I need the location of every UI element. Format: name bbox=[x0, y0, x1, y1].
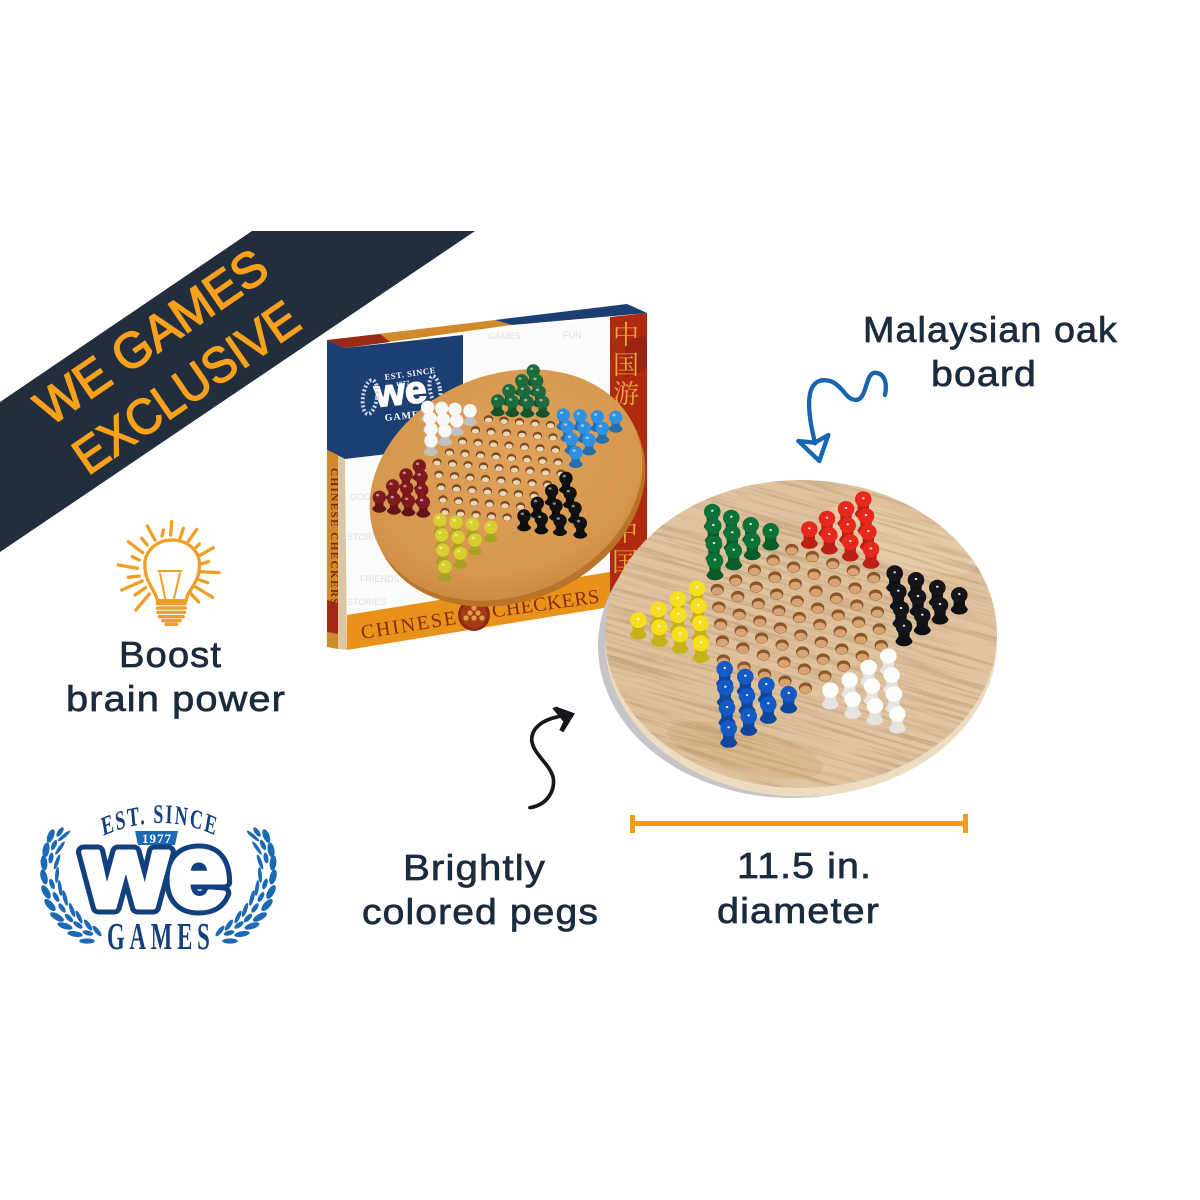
logo arched text: EST. SINCE bbox=[100, 805, 216, 836]
arrow: black squiggle to pegs bbox=[530, 707, 575, 808]
box mini logo: EST. SINCE bbox=[384, 365, 436, 382]
red pegs bbox=[801, 491, 880, 569]
box faint background words: FUN bbox=[563, 330, 582, 340]
board face bbox=[332, 327, 680, 643]
board edge bbox=[335, 333, 683, 649]
text: Malaysian oak board: board bbox=[931, 353, 1037, 394]
green pegs bbox=[704, 504, 779, 580]
logo year ribbon: 1977 bbox=[142, 831, 172, 846]
box orange band: CHINESE bbox=[359, 607, 458, 644]
text: boost brain power: Boost bbox=[119, 634, 222, 675]
yellow pegs bbox=[630, 580, 710, 663]
black pegs bbox=[517, 472, 587, 539]
green pegs bbox=[491, 364, 550, 418]
text: brightly colored pegs: Brightly bbox=[403, 847, 546, 888]
board holes bbox=[432, 415, 566, 521]
banner text: WE GAMES bbox=[25, 238, 278, 436]
box red panel: 中 bbox=[612, 518, 638, 547]
text: 11.5 in. diameter: diameter bbox=[717, 890, 880, 931]
logo WE lettering: we bbox=[83, 814, 228, 930]
box mini logo bbox=[361, 365, 442, 424]
text: 11.5 in. diameter bbox=[717, 845, 880, 931]
white pegs bbox=[822, 648, 906, 734]
box mini logo: 1977 bbox=[396, 381, 410, 388]
text: brightly colored pegs bbox=[362, 847, 599, 932]
logo laurels bbox=[39, 826, 278, 944]
box faint background words: GAMES bbox=[488, 331, 521, 341]
measure bar: diameter bbox=[630, 814, 968, 833]
blue pegs bbox=[556, 408, 623, 468]
box front face bbox=[345, 313, 647, 650]
box mini logo: GAMES bbox=[384, 409, 427, 424]
box red panel: 国 bbox=[613, 351, 639, 380]
box faint background words: GOOD bbox=[350, 492, 378, 502]
box faint background words: FRIENDS bbox=[360, 574, 400, 584]
banner text: EXCLUSIVE bbox=[62, 290, 310, 485]
text: boost brain power bbox=[66, 634, 286, 719]
text: brightly colored pegs: colored pegs bbox=[362, 891, 599, 932]
box orange band bbox=[347, 572, 610, 650]
box faint background words: STORIES bbox=[347, 597, 386, 607]
box red panel bbox=[610, 313, 647, 607]
box lid edge bbox=[327, 304, 647, 348]
logo: WE Games bbox=[40, 805, 277, 957]
blue pegs bbox=[716, 661, 797, 748]
box spine bbox=[327, 340, 347, 650]
box mini logo: we bbox=[372, 369, 429, 416]
box orange band: CHECKERS bbox=[491, 586, 601, 622]
box spine: CHINESE CHECKERS bbox=[328, 468, 340, 606]
board: Malaysian oak board with pegs bbox=[598, 480, 997, 798]
text: Malaysian oak board: Malaysian oak bbox=[863, 309, 1118, 350]
dark red pegs bbox=[372, 459, 430, 518]
white pegs bbox=[421, 401, 477, 456]
text: 11.5 in. diameter: 11.5 in. bbox=[737, 845, 872, 886]
logo WE lettering: we bbox=[83, 814, 228, 930]
board holes bbox=[711, 544, 888, 694]
box faint background words: STORIES bbox=[347, 532, 386, 542]
board shadow bbox=[598, 494, 986, 798]
logo year ribbon bbox=[135, 831, 178, 846]
logo GAMES lettering: GAMES bbox=[107, 915, 215, 957]
black pegs bbox=[886, 565, 968, 646]
board: box game board with pegs bbox=[332, 327, 683, 649]
product box bbox=[327, 304, 647, 650]
board face bbox=[605, 480, 997, 788]
board edge bbox=[605, 486, 997, 796]
icon: light bulb bbox=[118, 522, 219, 624]
text: Malaysian oak board bbox=[863, 309, 1118, 394]
box red panel: 游 bbox=[613, 380, 639, 409]
box red panel: 中 bbox=[613, 321, 639, 350]
arrow: blue squiggle to board bbox=[798, 373, 886, 461]
text: boost brain power: brain power bbox=[66, 678, 286, 719]
yellow pegs bbox=[433, 513, 498, 582]
box faint background words bbox=[347, 330, 582, 607]
banner: WE Games Exclusive bbox=[0, 231, 475, 552]
box red panel: 国 bbox=[612, 548, 638, 577]
box navy panel bbox=[345, 335, 463, 459]
